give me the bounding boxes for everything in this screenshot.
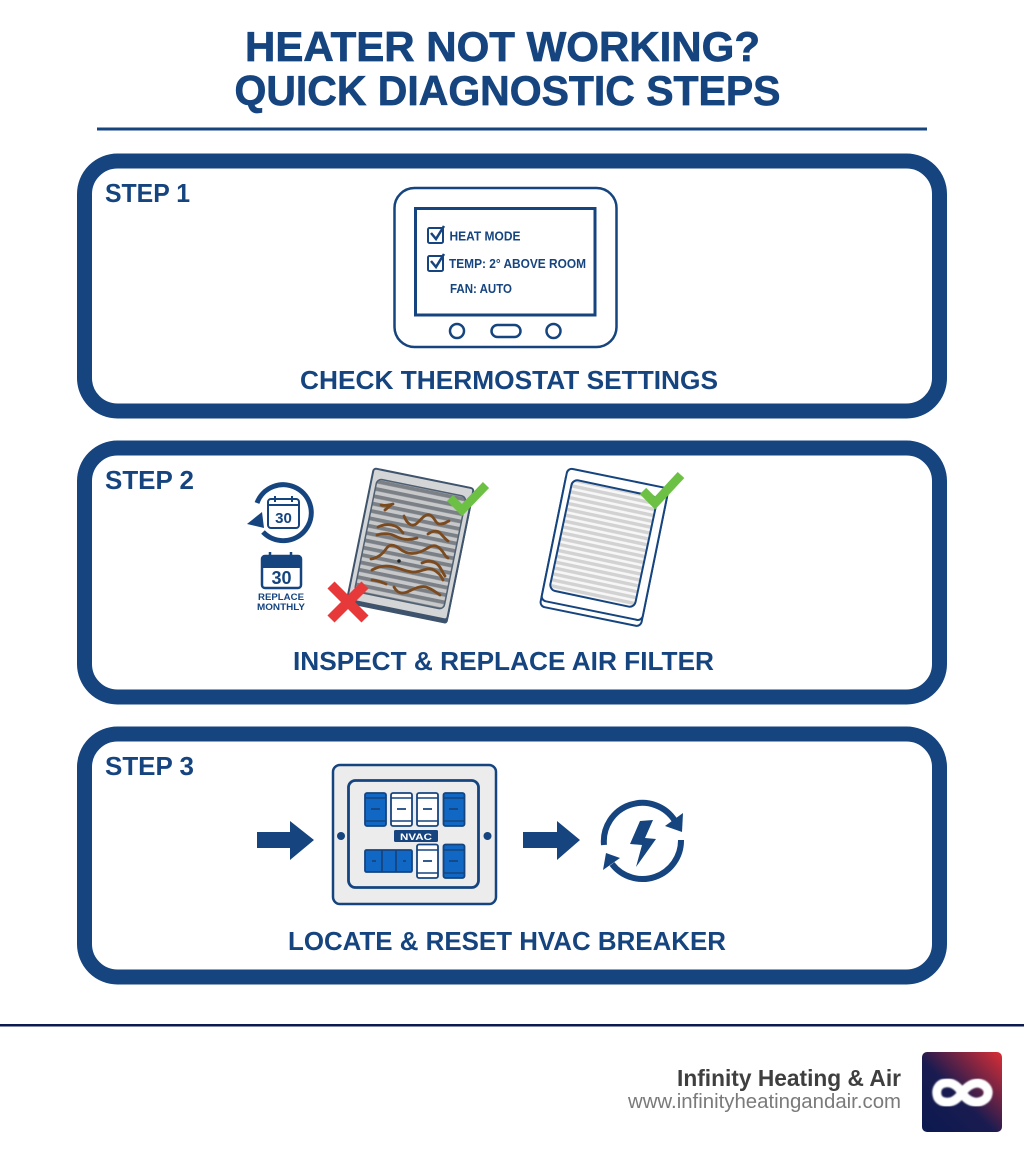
title: QUICK DIAGNOSTIC STEPS [234,67,780,114]
icon: green check on clean filter [643,475,681,503]
footer rule [0,1024,1024,1026]
dirt streaks [371,504,449,595]
icon: replace monthly calendar [257,552,306,613]
icon: red x [331,585,365,619]
breakers top row [365,793,464,826]
hvac label [394,830,438,842]
title [234,23,780,114]
icon: green check on dirty filter [450,485,486,510]
icon: thermostat: TEMP: 2° ABOVE ROOM [449,256,586,271]
panel: step 1 [84,161,940,411]
breakers bottom row [365,844,464,878]
icon: thermostat: HEAT MODE [450,228,521,244]
icon: 30-day cycle calendar [247,485,311,541]
title: HEATER NOT WORKING? [245,23,760,70]
icon: replace monthly calendar: 30 [271,568,292,588]
arrow: to reset icon [523,821,580,860]
logo [922,1052,1002,1132]
hvac label: NVAC [400,832,433,842]
icon: thermostat [394,188,616,347]
icon: replace monthly calendar: MONTHLY [257,602,306,613]
footer brand text: Infinity Heating & Air [677,1065,901,1091]
arrow: to breaker panel [257,821,314,860]
icon: replace monthly calendar: REPLACE [258,592,304,603]
icon: thermostat: FAN: AUTO [450,281,512,296]
icon: breaker panel [333,765,496,904]
step 3 label: STEP 3 [105,751,194,781]
icon: 30-day cycle calendar: 30 [275,510,292,527]
icon: dirty air filter [346,468,475,624]
panel: step 2 [84,448,940,697]
step 1 label: STEP 1 [105,178,190,208]
step 1 caption: CHECK THERMOSTAT SETTINGS [300,365,718,395]
step 3 caption: LOCATE & RESET HVAC BREAKER [288,926,726,956]
step 2 caption: INSPECT & REPLACE AIR FILTER [293,646,714,676]
icon: power reset [603,803,683,879]
panel: step 3 [84,734,940,977]
footer brand text: www.infinityheatingandair.com [627,1091,901,1113]
footer brand text [627,1065,901,1113]
step 2 label: STEP 2 [105,465,194,495]
icon: clean air filter [540,468,669,627]
